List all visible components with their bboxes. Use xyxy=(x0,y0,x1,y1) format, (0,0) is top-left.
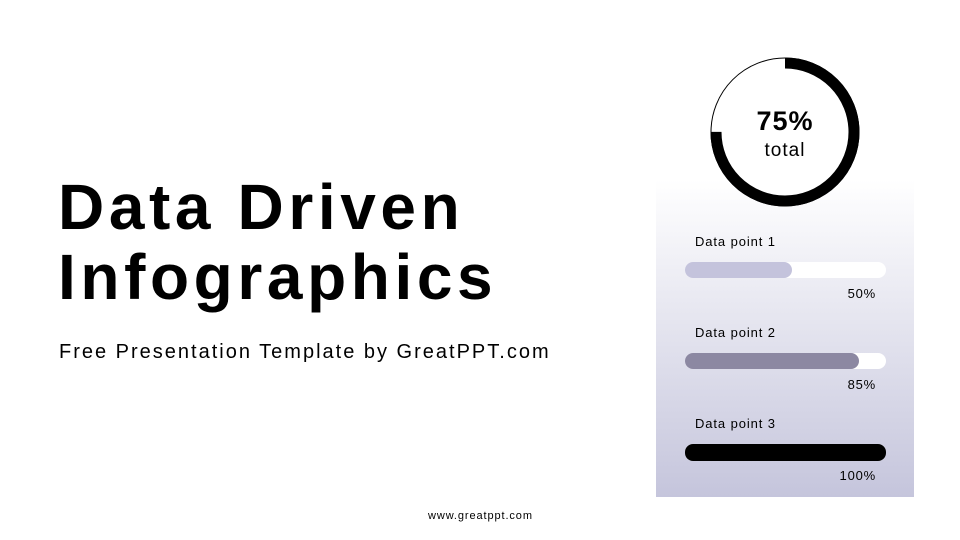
text: 85% xyxy=(848,377,876,392)
text: Data point 3 xyxy=(695,416,776,431)
title: Data Driven xyxy=(58,171,464,243)
donut chart: 75% total: 75% xyxy=(756,106,814,136)
text: 100% xyxy=(840,468,876,483)
text: 50% xyxy=(848,286,876,301)
subtitle: Free Presentation Template by GreatPPT.com xyxy=(59,341,551,363)
donut chart: 75% total: total xyxy=(765,140,805,161)
text: Data point 1 xyxy=(695,234,776,249)
data point 3 xyxy=(685,416,886,483)
data point 2 xyxy=(685,325,886,392)
panel: data points xyxy=(656,180,914,497)
text: Data point 2 xyxy=(695,325,776,340)
data point 1 xyxy=(685,234,886,301)
footer url: www.greatppt.com xyxy=(428,510,533,522)
title xyxy=(58,171,497,313)
donut chart: 75% total xyxy=(710,58,860,206)
title: Infographics xyxy=(58,241,497,313)
